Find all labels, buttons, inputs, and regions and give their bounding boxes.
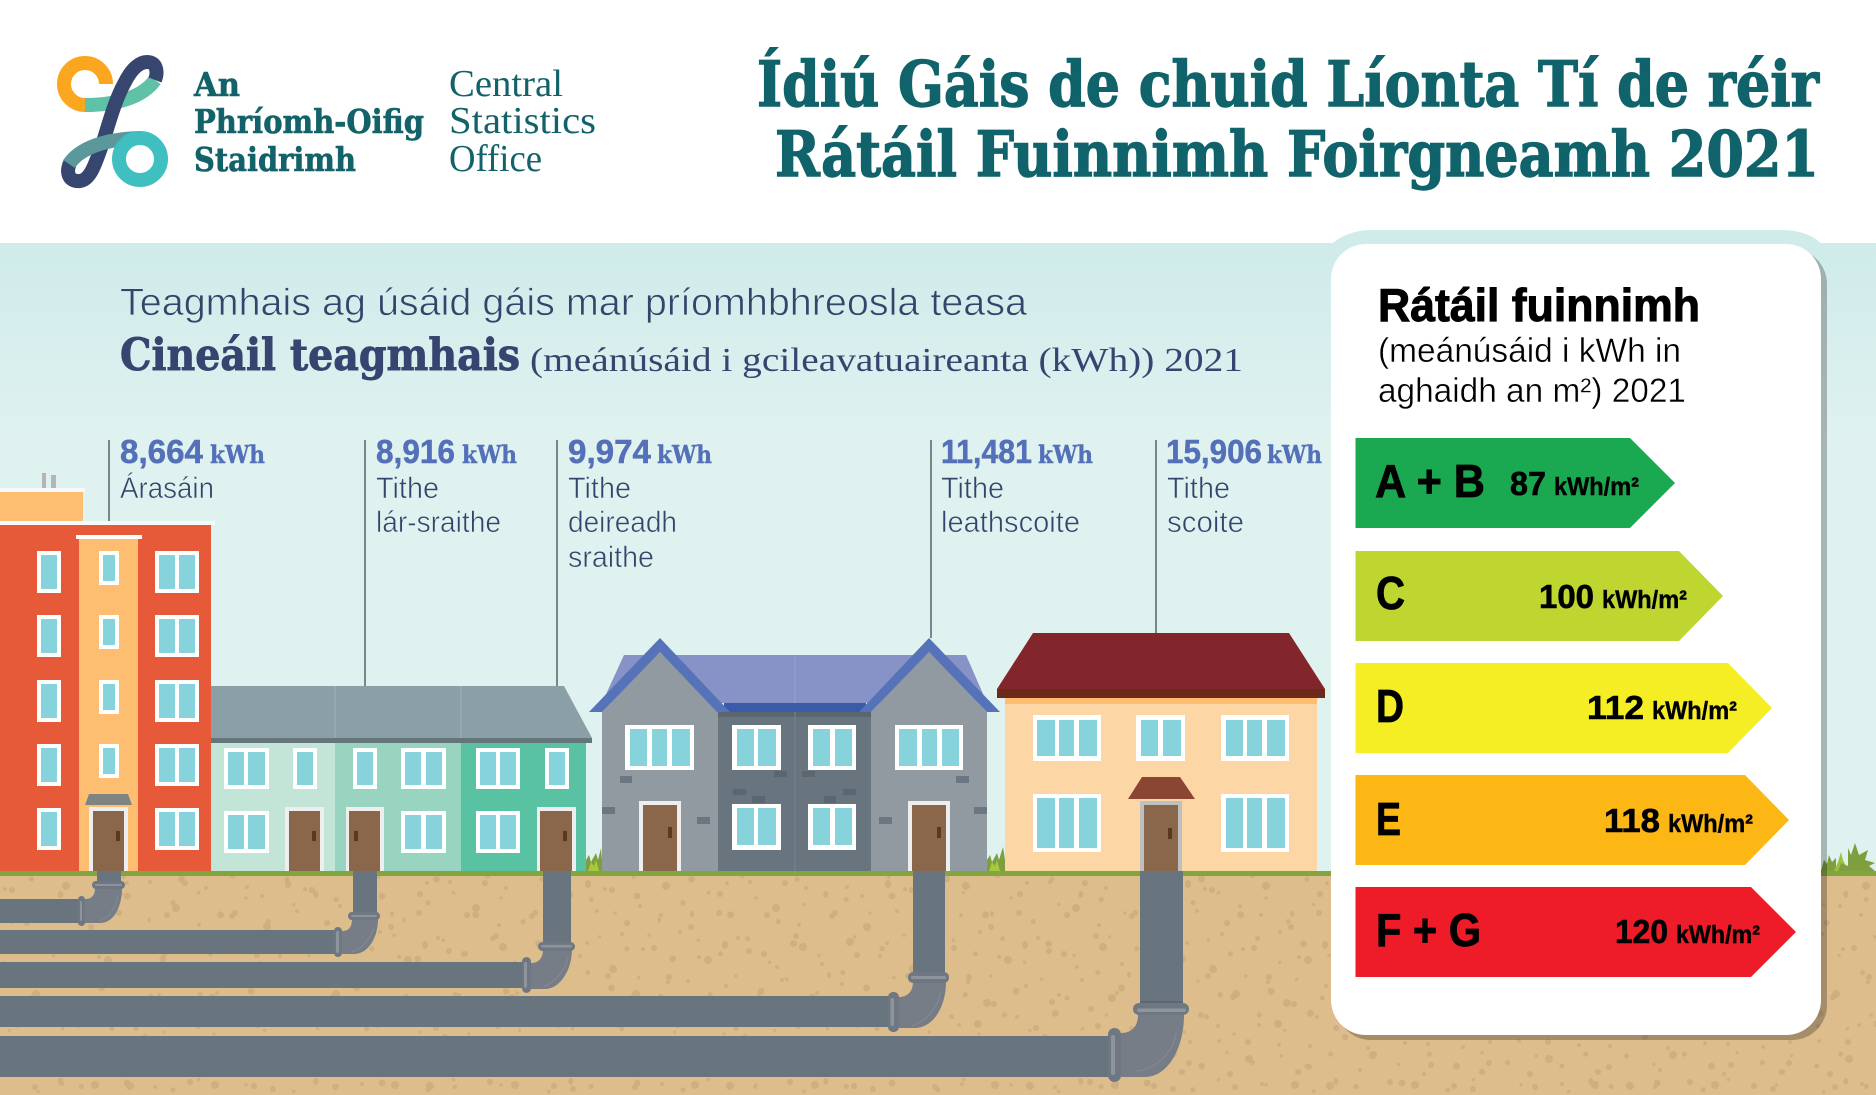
logo wordmark English <box>449 63 596 180</box>
rating arrow: D: D <box>1376 680 1404 732</box>
rating arrow: C <box>1356 551 1723 641</box>
gas pipes <box>0 871 1189 1082</box>
label: end-terrace 9,974 kWh: Tithe <box>568 472 631 505</box>
logo wordmark Irish: An <box>193 65 240 104</box>
label: mid-terrace 8,916 kWh: kWh <box>462 440 517 469</box>
logo wordmark English: Central <box>449 63 563 105</box>
building: terraced houses <box>211 686 592 871</box>
label: semi-detached 11,481 kWh <box>941 433 1093 539</box>
label: mid-terrace 8,916 kWh: Tithe <box>376 472 439 505</box>
gable trim <box>589 638 730 712</box>
label: end-terrace 9,974 kWh: 9,974 <box>568 433 652 470</box>
rating arrow: F + G: F + G <box>1376 904 1481 956</box>
label: detached 15,906 kWh: scoite <box>1167 506 1244 539</box>
panel heading: aghaidh an m²) 2021 <box>1378 372 1686 410</box>
pipe 5: detached <box>0 871 1189 1082</box>
logo wordmark Irish <box>193 65 424 179</box>
grass tufts <box>586 843 1875 871</box>
rating arrow: C: 100 <box>1539 578 1594 615</box>
rating arrow: F + G: kWh/m² <box>1676 921 1760 949</box>
label: apartments 8,664 kWh: 8,664 <box>120 433 204 470</box>
building: detached house <box>997 633 1325 871</box>
subtitle: Teagmhais ag úsáid gáis mar príomhbhreosla teasa <box>120 282 1028 324</box>
panel heading <box>1378 279 1700 410</box>
rating arrow: F + G <box>1356 887 1796 977</box>
rating arrow: A + B: 87 <box>1510 465 1546 502</box>
logo wordmark English: Office <box>449 138 542 180</box>
header background <box>0 0 1876 243</box>
logo wordmark English: Statistics <box>449 100 596 142</box>
label: end-terrace 9,974 kWh <box>568 433 712 574</box>
label: semi-detached 11,481 kWh: kWh <box>1038 440 1093 469</box>
panel heading: Rátáil fuinnimh <box>1378 279 1700 331</box>
panel: energy rating <box>1327 230 1827 1040</box>
ground grass line <box>0 871 1876 876</box>
logo mark <box>64 62 161 181</box>
rating arrow: E <box>1356 775 1789 865</box>
label: detached 15,906 kWh <box>1166 433 1322 539</box>
label: semi-detached 11,481 kWh: Tithe <box>941 472 1004 505</box>
apartment windows <box>37 551 199 850</box>
label: detached 15,906 kWh: kWh <box>1267 440 1322 469</box>
logo wordmark Irish: Staidrimh <box>194 140 356 179</box>
label: detached 15,906 kWh: Tithe <box>1167 472 1230 505</box>
rating arrow: C: kWh/m² <box>1602 586 1687 614</box>
label: mid-terrace 8,916 kWh <box>376 433 517 539</box>
rating arrow: E: kWh/m² <box>1668 810 1753 838</box>
semi-detached doors <box>639 801 950 871</box>
detached door <box>1128 777 1195 799</box>
label: semi-detached 11,481 kWh: leathscoite <box>941 506 1080 539</box>
rating arrow: F + G: 120 <box>1615 913 1668 950</box>
semi-detached windows <box>625 725 963 850</box>
rating arrow: D: 112 <box>1587 689 1644 726</box>
terrace doors <box>285 807 576 871</box>
soil ground <box>0 876 1876 1095</box>
subtitle: Cineáil teagmhais <box>120 330 520 381</box>
rating arrow: A + B: A + B <box>1375 455 1485 507</box>
label: semi-detached 11,481 kWh: 11,481 <box>941 433 1032 470</box>
panel heading: (meánúsáid i kWh in <box>1378 332 1681 370</box>
rating arrow: D <box>1356 663 1772 753</box>
logo wordmark Irish: Phríomh-Oifig <box>194 102 424 141</box>
label: end-terrace 9,974 kWh: deireadh <box>568 506 677 539</box>
subtitle <box>120 282 1243 381</box>
rating arrow: E: 118 <box>1604 802 1660 839</box>
label: mid-terrace 8,916 kWh: 8,916 <box>376 433 455 470</box>
label: apartments 8,664 kWh <box>120 433 265 505</box>
terrace windows <box>224 748 569 853</box>
pipe 3: end-terrace <box>0 871 575 993</box>
pipe 1: apartments <box>0 871 125 926</box>
title <box>757 47 1820 191</box>
rating arrow: A + B <box>1356 438 1675 528</box>
label: mid-terrace 8,916 kWh: lár-sraithe <box>376 506 501 539</box>
rating arrow: A + B: kWh/m² <box>1554 473 1639 501</box>
sky background <box>0 243 1876 873</box>
label: apartments 8,664 kWh: kWh <box>210 440 265 469</box>
rating arrow: E: E <box>1376 793 1401 845</box>
leader lines <box>109 440 1156 686</box>
building: semi-detached houses <box>589 638 1000 871</box>
label: end-terrace 9,974 kWh: kWh <box>657 440 712 469</box>
building: apartments <box>0 473 215 871</box>
detached windows <box>1033 715 1289 852</box>
logo: Central Statistics Office <box>64 62 596 181</box>
pipe 2: mid-terrace <box>0 871 380 957</box>
pipe 4: semi-detached <box>0 871 949 1032</box>
label: apartments 8,664 kWh: Árasáin <box>120 472 214 505</box>
label: detached 15,906 kWh: 15,906 <box>1166 433 1262 470</box>
chimneys <box>42 473 56 488</box>
rating arrow: D: kWh/m² <box>1652 697 1737 725</box>
rating arrow: C: C <box>1376 567 1405 619</box>
subtitle: (meánúsáid i gcileavatuaireanta (kWh)) 2021 <box>530 342 1243 379</box>
bricks <box>602 776 987 824</box>
label: end-terrace 9,974 kWh: sraithe <box>568 541 654 574</box>
apartment door <box>85 794 132 805</box>
